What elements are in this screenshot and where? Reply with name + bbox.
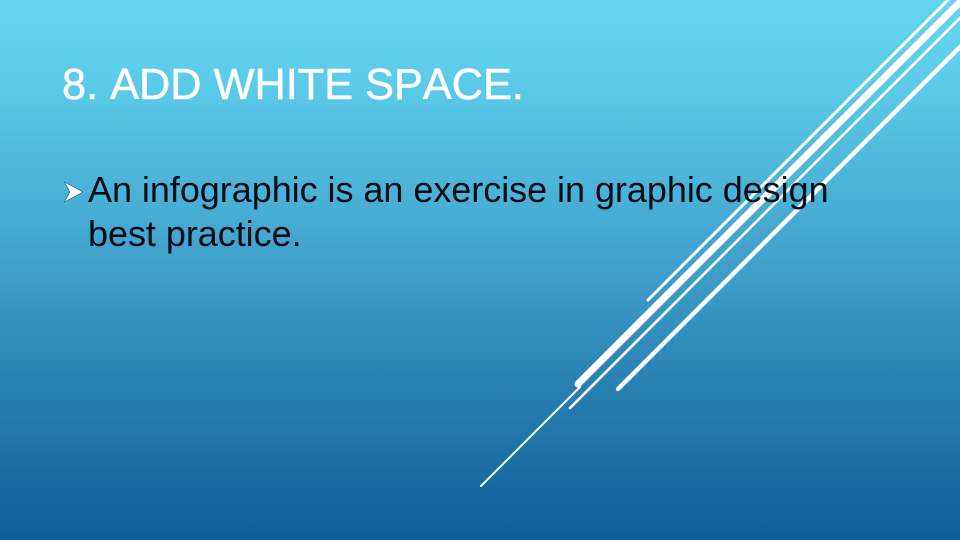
title: 8. ADD WHITE SPACE. [62, 61, 524, 109]
body text: best practice. [88, 213, 302, 254]
icon: arrowhead bullet [64, 182, 83, 202]
bullet text block [64, 169, 829, 254]
body text: An infographic is an exercise in graphic design [88, 169, 829, 210]
body text [88, 169, 829, 254]
